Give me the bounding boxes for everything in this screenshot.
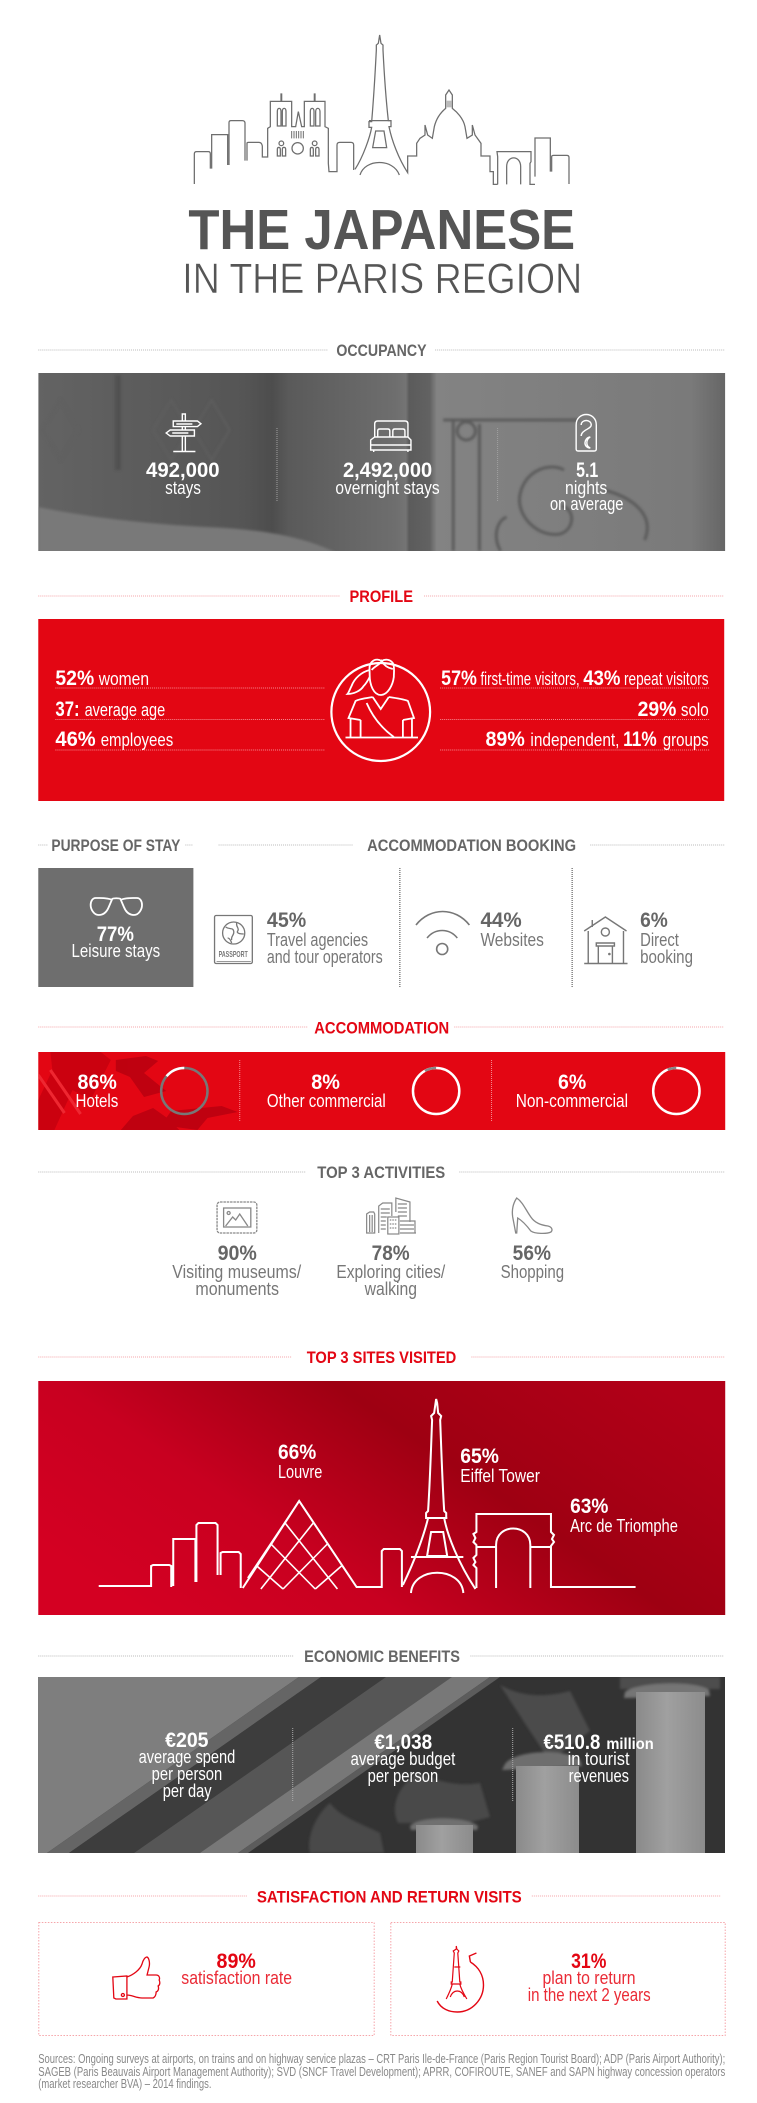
title: THE JAPANESE — [188, 198, 575, 262]
activity: shopping: Shopping — [501, 1261, 564, 1282]
booking: websites: Websites — [480, 929, 544, 950]
icon: thumbs up — [113, 1957, 160, 1999]
icon: woman traveller in circle — [331, 660, 430, 761]
icon: house — [584, 917, 628, 964]
label: Eiffel Tower — [460, 1445, 540, 1486]
right stat: independent and groups: groups — [663, 729, 709, 750]
activity: museums: 90% — [218, 1242, 257, 1265]
left stat: average age: 37: — [55, 698, 80, 721]
right stat: solo — [638, 698, 709, 721]
title — [182, 198, 582, 303]
stat: tourist revenues: €510.8 — [544, 1731, 601, 1754]
activity: museums — [172, 1202, 302, 1299]
item: non-commercial: Non-commercial — [516, 1090, 628, 1111]
section heading: top 3 activities: TOP 3 ACTIVITIES — [317, 1163, 445, 1182]
activity: exploring cities: walking — [364, 1278, 417, 1299]
stat: overnight stays: 2,492,000 — [343, 459, 432, 482]
stat: tourist revenues: revenues — [569, 1765, 629, 1786]
right stat: visitors: 43% — [583, 667, 621, 690]
card: return visits: 31% — [571, 1950, 607, 1973]
stat: nights on average: nights — [565, 477, 607, 498]
booking: direct booking: booking — [640, 946, 693, 967]
icon: sunglasses — [91, 898, 142, 915]
stat: stays: 492,000 — [146, 459, 220, 482]
label: Louvre: 66% — [278, 1441, 317, 1464]
label: Arc de Triomphe: Arc de Triomphe — [570, 1515, 678, 1536]
activity: exploring cities: 78% — [372, 1242, 410, 1265]
activity: exploring cities: Exploring cities/ — [336, 1261, 446, 1282]
right stat: solo: 29% — [638, 698, 677, 721]
icon: bed — [371, 421, 411, 452]
left stat: employees — [55, 728, 173, 751]
panel: purpose of stay — [38, 868, 193, 987]
ring: 8 percent — [405, 1060, 468, 1122]
stat: nights on average: 5.1 — [576, 459, 599, 482]
stat: nights on average: on average — [550, 493, 623, 514]
background photo: hotel bedroom — [38, 373, 725, 556]
icon: Eiffel Tower with return arrow — [437, 1946, 483, 2012]
left stat: average age: average age — [85, 699, 165, 720]
section heading: profile: PROFILE — [350, 587, 413, 606]
background pattern: red foliage — [38, 1052, 238, 1130]
label: Eiffel Tower: 65% — [460, 1445, 499, 1468]
label: Louvre — [278, 1441, 322, 1482]
section heading: satisfaction and return visits: SATISFACTION AND RETURN VISITS — [257, 1888, 522, 1906]
icon: passport: PASSPORT — [219, 950, 248, 959]
activity: shopping: 56% — [513, 1242, 551, 1265]
right stat: independent and groups: 89% — [485, 728, 525, 751]
stat: average spend — [139, 1729, 235, 1801]
ring: 6 percent — [646, 1061, 707, 1121]
stat: overnight stays — [335, 421, 440, 498]
stat: tourist revenues: in tourist — [568, 1748, 630, 1769]
background photo: columned building — [38, 1677, 725, 1853]
left stat: women — [55, 667, 149, 690]
right stat: visitors — [441, 667, 709, 690]
booking: travel agencies: Travel agencies — [267, 929, 368, 950]
booking: direct booking: 6% — [640, 909, 668, 932]
sources note: (market researcher BVA) – 2014 findings. — [38, 2077, 212, 2091]
booking: travel agencies — [215, 909, 383, 967]
right stat: visitors: 57% — [441, 667, 477, 690]
section heading: economic benefits: ECONOMIC BENEFITS — [304, 1647, 460, 1666]
card: return visits — [391, 1922, 725, 2036]
icon: passport — [215, 916, 252, 964]
stat: average spend: per person — [152, 1763, 222, 1784]
left stat: average age — [55, 698, 165, 721]
stat: overnight stays: overnight stays — [335, 477, 440, 498]
stat: tourist revenues — [544, 1731, 654, 1786]
item: non-commercial: 6% — [558, 1071, 586, 1094]
item: hotels: 86% — [78, 1071, 117, 1094]
sources note — [38, 2052, 725, 2091]
stat: average budget — [351, 1731, 456, 1786]
activity: exploring cities — [336, 1198, 446, 1299]
booking: direct booking: Direct — [640, 929, 680, 950]
stat: average spend: per day — [163, 1780, 212, 1801]
right stat: visitors: repeat visitors — [624, 668, 709, 689]
left stat: women: 52% — [55, 667, 94, 690]
icon: high heel shoe — [512, 1198, 552, 1233]
card: satisfaction rate: 89% — [217, 1950, 256, 1973]
panel: top 3 sites visited — [38, 1381, 725, 1615]
booking: websites: 44% — [480, 909, 522, 932]
card: return visits: in the next 2 years — [528, 1984, 651, 2005]
left stat: women: women — [98, 668, 149, 689]
booking: travel agencies: and tour operators — [267, 946, 383, 967]
activity: museums: Visiting museums/ — [172, 1261, 302, 1282]
stat: tourist revenues: million — [606, 1735, 654, 1753]
ring: 86 percent — [152, 1059, 217, 1123]
right stat: independent and groups — [485, 728, 709, 751]
section heading: accommodation booking: ACCOMMODATION BOOKING — [367, 836, 576, 855]
left stat: employees: 46% — [55, 728, 96, 751]
icon: signpost — [166, 414, 201, 452]
panel: economic benefits — [38, 1677, 725, 1853]
label: Arc de Triomphe: 63% — [570, 1495, 609, 1518]
section heading: accommodation: ACCOMMODATION — [314, 1019, 449, 1037]
icon: picture frame — [217, 1202, 257, 1233]
booking: direct booking — [584, 909, 693, 967]
item: hotels: Hotels — [76, 1090, 118, 1111]
stat: average budget: €1,038 — [374, 1731, 432, 1754]
item: other commercial: 8% — [311, 1071, 340, 1094]
right stat: independent and groups: 11% — [623, 728, 657, 751]
activity: museums: monuments — [195, 1278, 279, 1299]
right stat: independent and groups: independent, — [530, 729, 619, 750]
stat: stays: stays — [165, 477, 201, 498]
stat: average spend: average spend — [139, 1746, 235, 1767]
label: Arc de Triomphe — [570, 1495, 678, 1536]
stat: average budget: average budget — [351, 1748, 456, 1769]
icon: wifi — [416, 912, 469, 954]
item: hotels — [76, 1059, 217, 1123]
activity: shopping — [501, 1198, 564, 1282]
skyline illustration — [194, 35, 569, 184]
panel: purpose of stay: 77% — [97, 923, 134, 946]
stat: nights on average — [550, 414, 623, 514]
icon: city buildings — [367, 1198, 416, 1234]
panel: purpose of stay: Leisure stays — [72, 940, 160, 961]
icon: white Paris skyline with pyramid, tower and arch — [99, 1399, 636, 1593]
stat: average budget: per person — [368, 1765, 438, 1786]
right stat: solo: solo — [681, 699, 709, 720]
item: non-commercial — [516, 1061, 707, 1121]
item: other commercial — [267, 1060, 468, 1122]
item: other commercial: Other commercial — [267, 1090, 386, 1111]
title: IN THE PARIS REGION — [182, 255, 582, 303]
card: return visits: plan to return — [543, 1967, 636, 1988]
section heading: occupancy: OCCUPANCY — [336, 341, 427, 360]
panel: accommodation — [38, 1052, 725, 1130]
stat: average spend: €205 — [165, 1729, 209, 1752]
booking: websites — [416, 909, 544, 954]
card: satisfaction rate: satisfaction rate — [181, 1967, 292, 1988]
label: Louvre: Louvre — [278, 1461, 322, 1482]
section heading: top 3 sites visited: TOP 3 SITES VISITED — [307, 1348, 456, 1367]
panel: profile — [38, 619, 724, 801]
card: satisfaction rate — [39, 1922, 374, 2036]
section heading: purpose of stay: PURPOSE OF STAY — [51, 836, 181, 855]
right stat: visitors: first-time visitors, — [480, 668, 580, 689]
panel: occupancy — [38, 373, 725, 556]
left stat: employees: employees — [101, 729, 173, 750]
icon: door hanger — [576, 414, 596, 451]
label: Eiffel Tower: Eiffel Tower — [460, 1465, 540, 1486]
booking: travel agencies: 45% — [267, 909, 306, 932]
stat: stays — [146, 414, 220, 498]
